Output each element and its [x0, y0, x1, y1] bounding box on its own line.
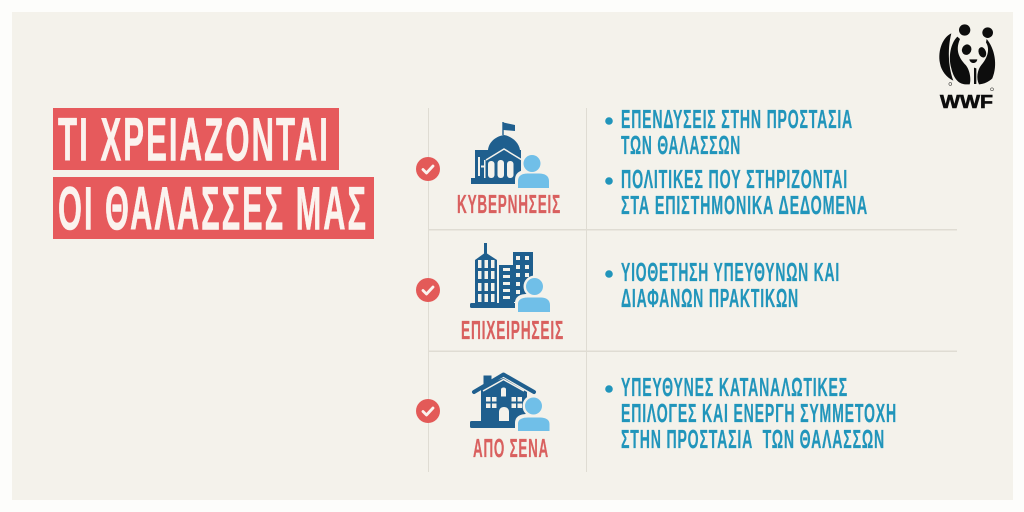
- check icon: you: [416, 399, 440, 423]
- icon: office towers with person: [470, 243, 553, 314]
- check icon: businesses: [416, 278, 440, 302]
- WWF panda logo: WWF: [940, 92, 993, 112]
- list: businesses: [605, 257, 840, 313]
- icon: government building with person: [471, 122, 552, 190]
- label: businesses: ΕΠΙΧΕΙΡΗΣΕΙΣ: [461, 315, 564, 345]
- label: you: ΑΠΟ ΣΕΝΑ: [473, 433, 549, 463]
- list: you: [605, 372, 897, 454]
- list: governments: ΤΩΝ ΘΑΛΑΣΣΩΝ: [621, 130, 741, 160]
- list: businesses: ΔΙΑΦΑΝΩΝ ΠΡΑΚΤΙΚΩΝ: [621, 283, 799, 313]
- title: ΟΙ ΘΑΛΑΣΣΕΣ ΜΑΣ: [58, 174, 368, 242]
- list: governments: ΠΟΛΙΤΙΚΕΣ ΠΟΥ ΣΤΗΡΙΖΟΝΤΑΙ: [621, 164, 848, 194]
- title: [53, 106, 374, 242]
- label: governments: ΚΥΒΕΡΝΗΣΕΙΣ: [457, 189, 561, 219]
- icon: house with person: [470, 374, 552, 433]
- list: governments: [605, 104, 868, 220]
- WWF panda logo: [939, 24, 995, 112]
- list: businesses: ΥΙΟΘΕΤΗΣΗ ΥΠΕΥΘΥΝΩΝ ΚΑΙ: [621, 257, 840, 287]
- title: ΤΙ ΧΡΕΙΑΖΟΝΤΑΙ: [58, 106, 330, 174]
- check icon: governments: [416, 157, 440, 181]
